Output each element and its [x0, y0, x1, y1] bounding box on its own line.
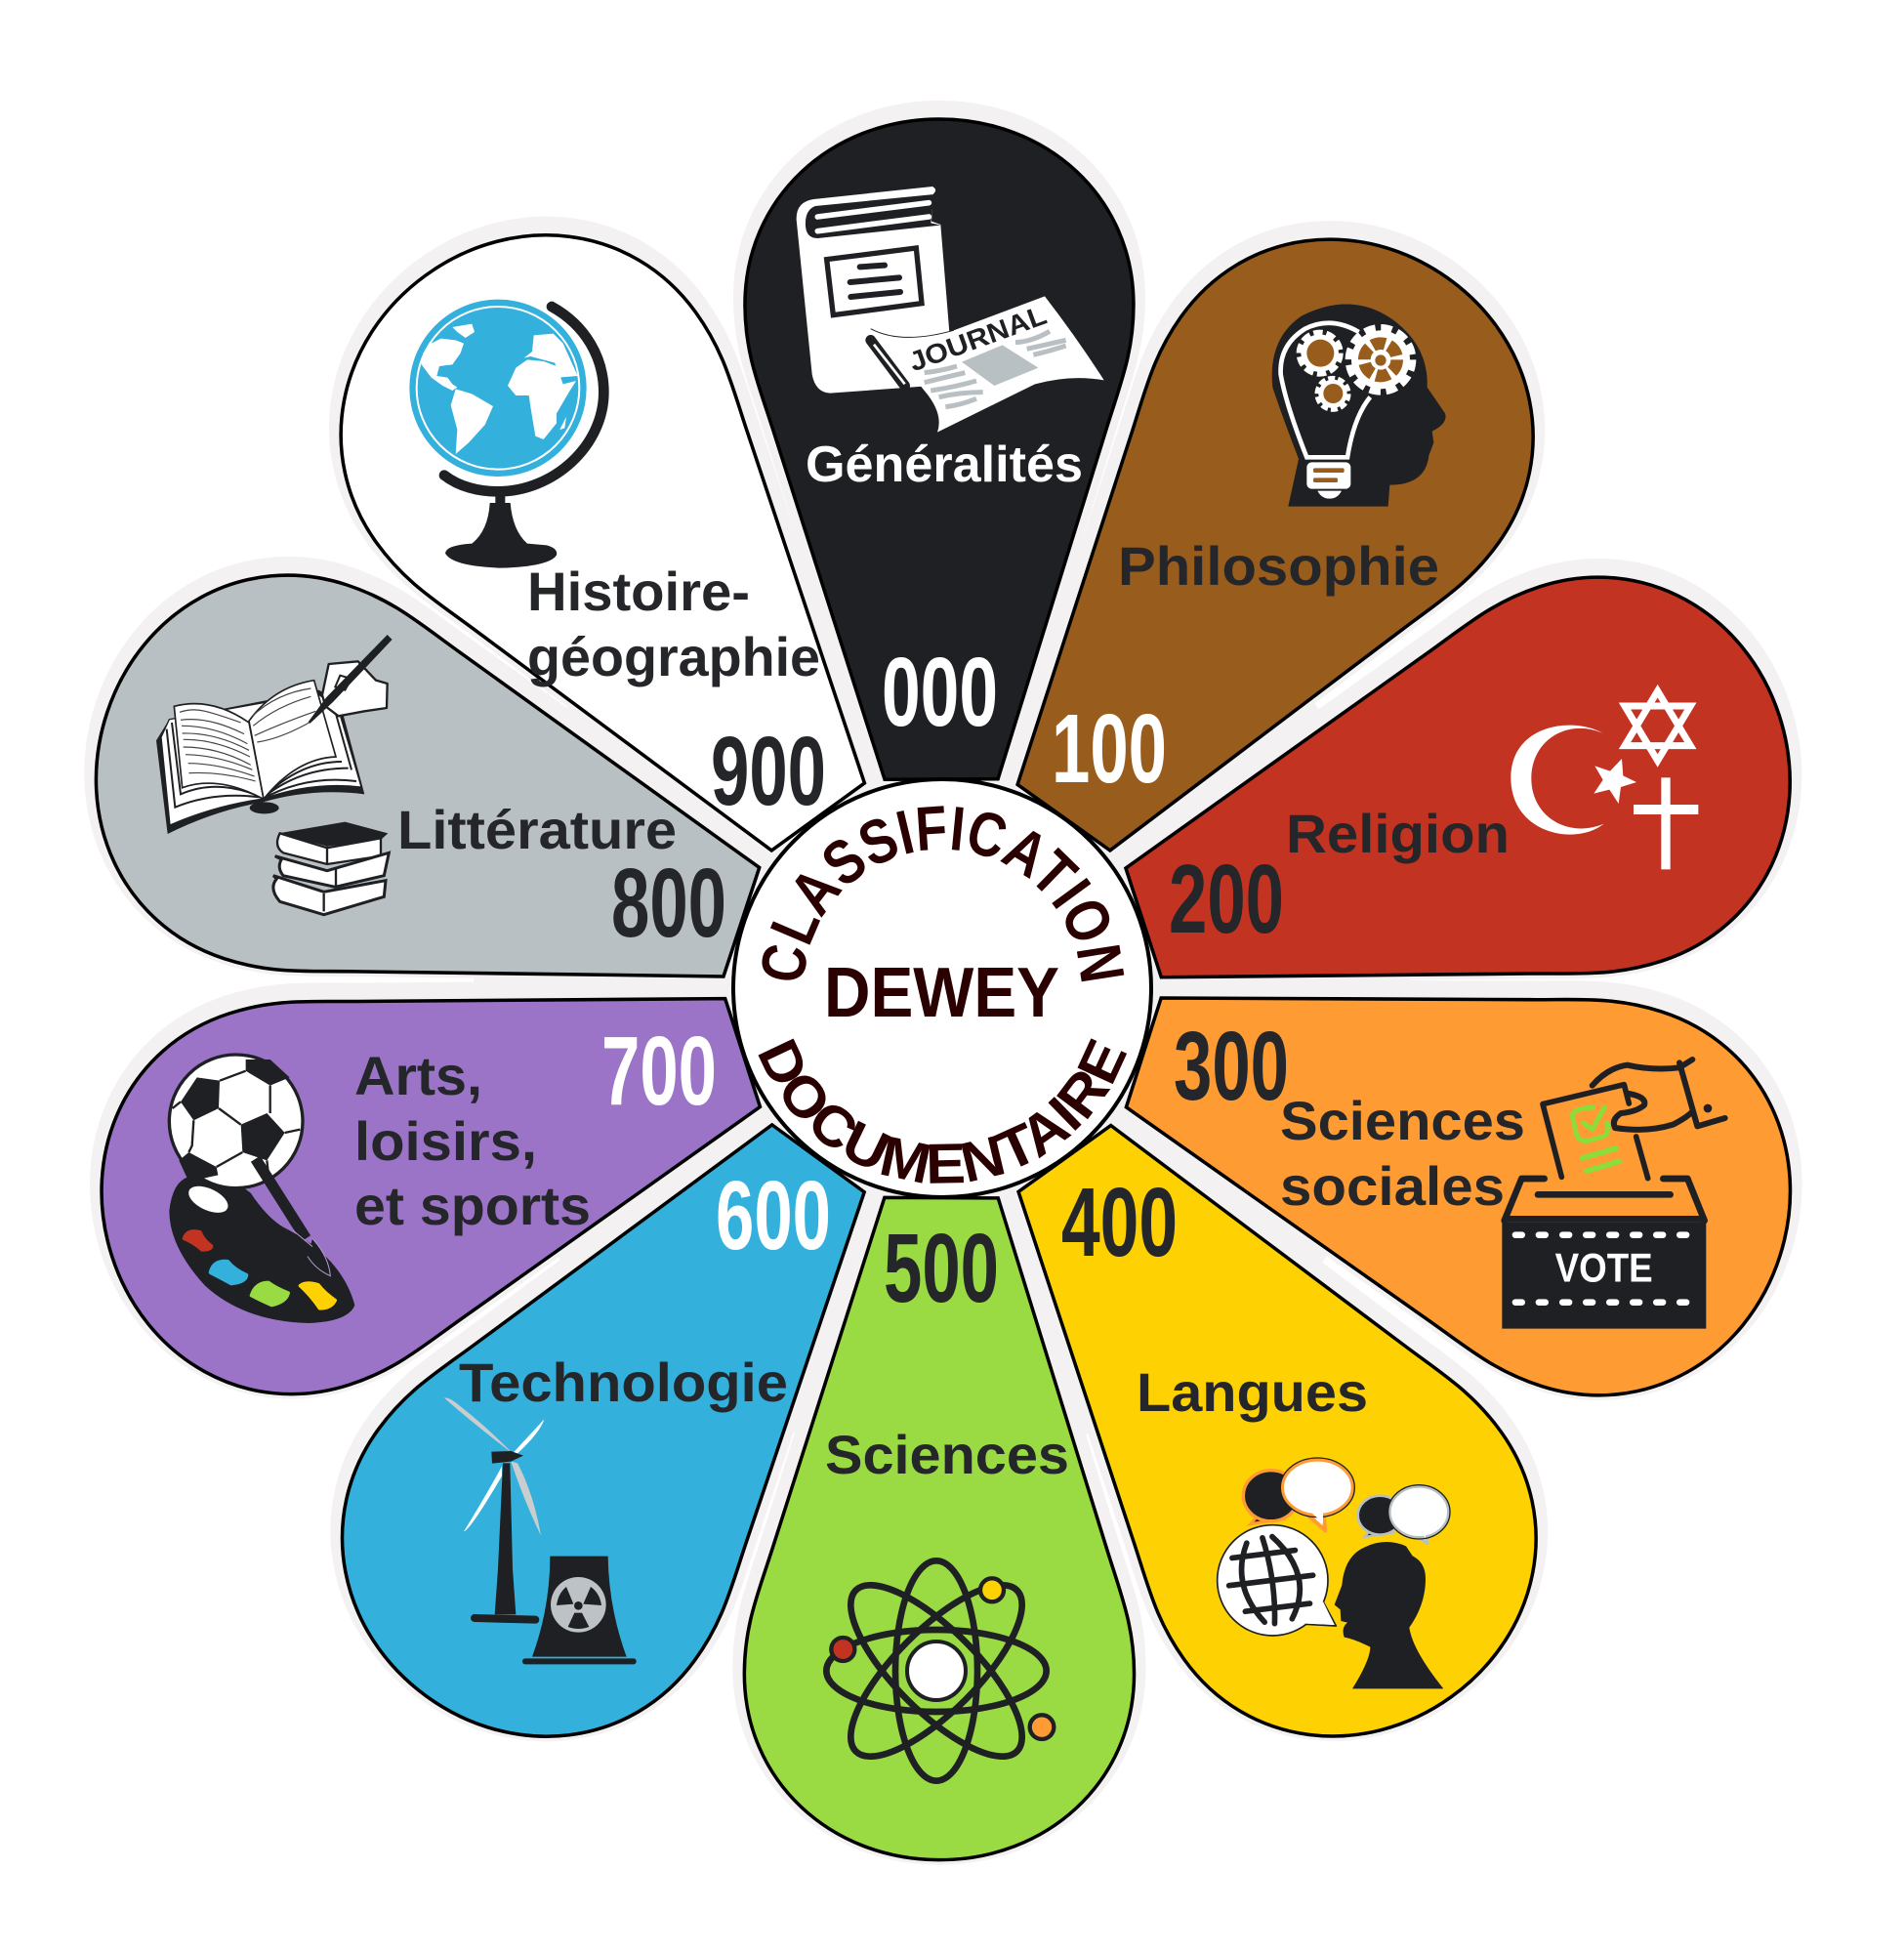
label: et sports: [354, 1175, 591, 1236]
icon: globe: [409, 300, 603, 568]
number: 200: [1169, 845, 1284, 954]
label: Sciences: [1280, 1090, 1525, 1151]
panel: 600 Technologie: [268, 1043, 976, 1811]
label: géographie: [527, 626, 820, 687]
panel: 500 Sciences: [744, 1197, 1137, 1861]
title arc: DOCUMENTAIRE: DOCUMENTAIRE: [758, 1038, 1127, 1184]
petal 000: [744, 118, 1136, 780]
panel: 800 Littérature: [46, 526, 803, 1108]
label: [354, 1045, 591, 1236]
label: Philosophie: [1118, 535, 1439, 597]
petal 500: [744, 1197, 1137, 1861]
icon: religious symbols: [1511, 691, 1698, 869]
icon: book and newspaper: JOURNAL: [905, 300, 1051, 377]
label: Langues: [1137, 1361, 1368, 1423]
petal 200: [1083, 528, 1841, 1110]
label: Littérature: [397, 799, 677, 860]
icon: ballot box: VOTE: [1555, 1245, 1653, 1291]
title arc: CLASSIFICATION: CLASSIFICATION: [762, 806, 1125, 982]
title center: DEWEY: DEWEY: [824, 954, 1059, 1032]
icon: wind turbine and nuclear tower: [444, 1397, 637, 1664]
label: Généralités: [806, 436, 1083, 493]
label: Histoire-: [527, 561, 750, 622]
panel: 400 Langues: [906, 1045, 1610, 1810]
label: loisirs,: [354, 1110, 537, 1172]
icon: head with bulb and gears: [1272, 304, 1446, 507]
petal 100: [905, 165, 1606, 931]
number: 300: [1174, 1012, 1289, 1121]
petal 900: [267, 160, 977, 933]
petal 600: [268, 1043, 976, 1811]
label: sociales: [1280, 1155, 1505, 1217]
panel: 000 Généralités: [744, 118, 1136, 780]
icon: speaking head and bubbles: [1218, 1458, 1450, 1688]
number: 800: [611, 849, 726, 958]
petal 700: [52, 867, 803, 1442]
center circle: [733, 779, 1151, 1197]
number: 400: [1061, 1168, 1178, 1277]
icon: ballot box: [1502, 1060, 1725, 1329]
label: Religion: [1286, 803, 1510, 864]
panel: 900 Histoire-géographie: [267, 160, 977, 933]
petal 300: [1084, 865, 1840, 1443]
number: 900: [711, 717, 826, 826]
petal 400: [906, 1045, 1610, 1810]
number: 100: [1052, 694, 1167, 804]
label: Arts,: [354, 1045, 482, 1106]
label: [527, 561, 820, 687]
number: 500: [884, 1214, 999, 1323]
panel: 200 Religion: [1083, 528, 1841, 1110]
center badge: [731, 777, 1153, 1197]
label: Technologie: [459, 1351, 788, 1413]
number: 000: [882, 638, 998, 747]
number: 700: [601, 1017, 717, 1126]
icon: open book and stack of books: [156, 637, 391, 915]
label: [1280, 1090, 1525, 1217]
panel: 300 Sciences sociales: [1084, 865, 1840, 1443]
panel: 100 Philosophie: [905, 165, 1606, 931]
icon: book and newspaper: [797, 187, 1104, 433]
petal 800: [46, 526, 803, 1108]
icon: palette and football: [169, 1055, 354, 1323]
number: 600: [716, 1161, 831, 1270]
panel: 700 Arts, loisirs, et sports: [52, 867, 803, 1442]
label: Sciences: [825, 1424, 1069, 1485]
icon: atom: [826, 1560, 1054, 1781]
